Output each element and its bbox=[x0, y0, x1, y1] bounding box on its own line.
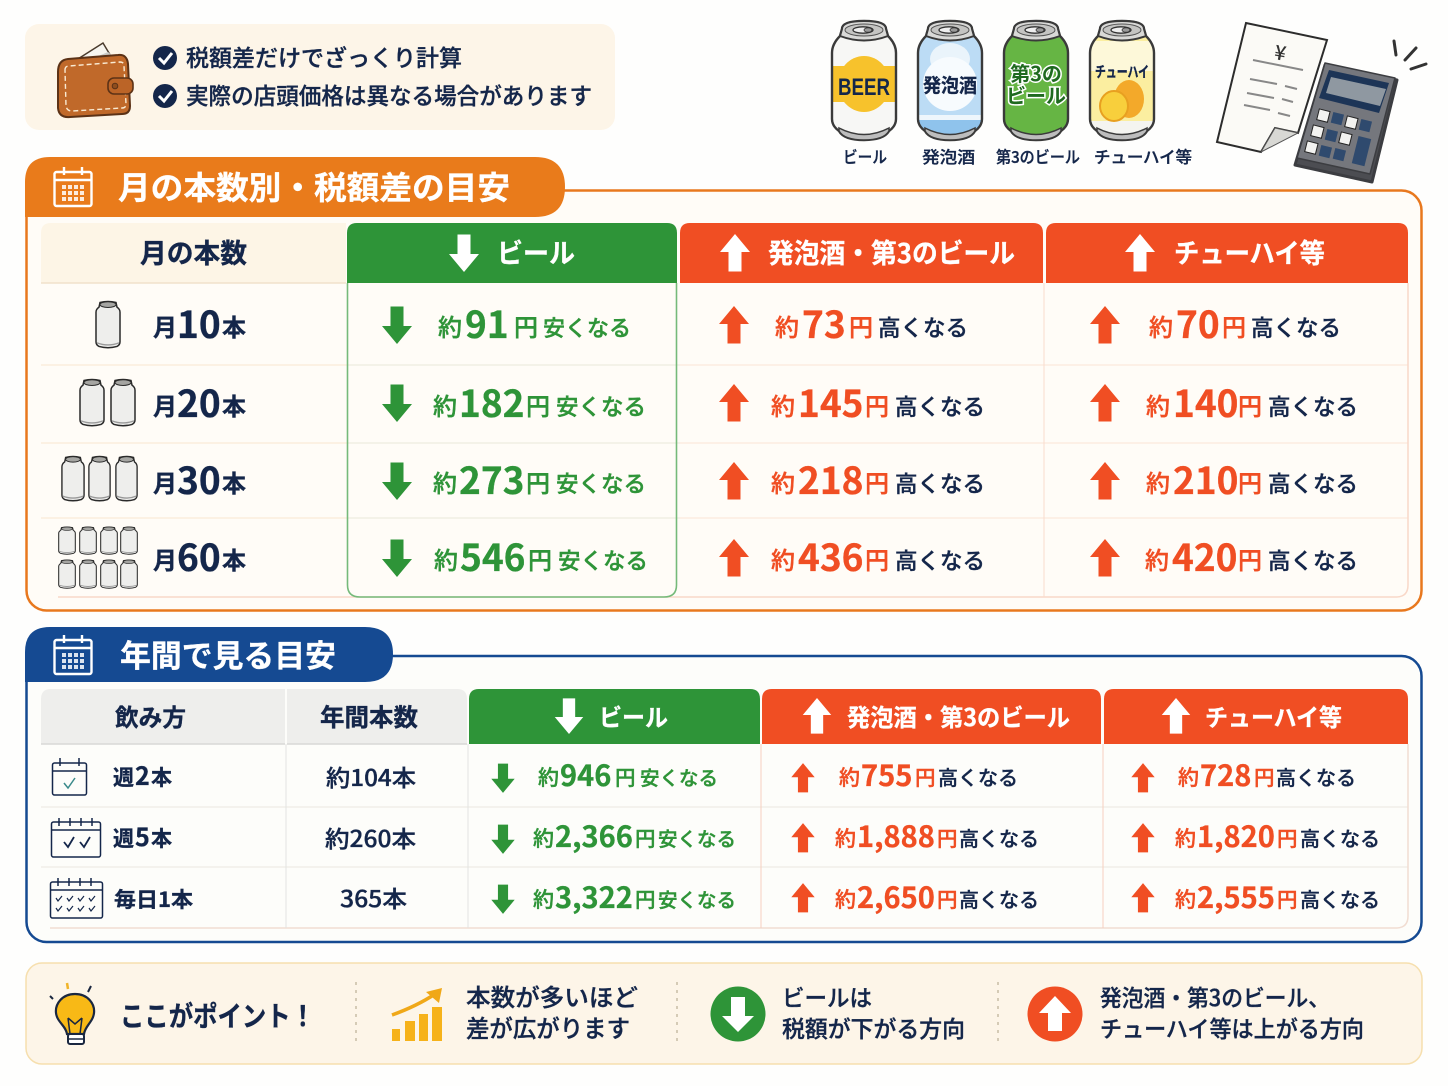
heading tab: annual bbox=[25, 627, 393, 682]
row: five times weekly: 約 bbox=[1175, 823, 1196, 853]
row: 60 per month: 60 bbox=[177, 528, 221, 582]
row: twice weekly: 高くなる bbox=[938, 762, 1018, 791]
icon: light bulb bbox=[50, 983, 94, 1044]
row: 20 per month: 約 bbox=[771, 387, 795, 422]
row: twice weekly: 約 bbox=[1178, 762, 1199, 792]
row: twice weekly: 946 bbox=[560, 753, 611, 795]
row: twice weekly: 2 bbox=[135, 757, 150, 793]
row: 10 per month: 約 bbox=[1149, 308, 1173, 343]
row: 10 per month: 10 bbox=[177, 295, 221, 349]
row: daily: 安くなる bbox=[658, 884, 736, 913]
row: 60 per month: 高くなる bbox=[1268, 544, 1358, 576]
row: five times weekly: 高くなる bbox=[1300, 823, 1380, 852]
row: 20 per month: 約 bbox=[433, 387, 457, 422]
row: five times weekly: 円 bbox=[937, 822, 958, 852]
row: 30 per month: 円 bbox=[526, 464, 550, 499]
text: point three bbox=[1100, 979, 1364, 1044]
row: 60 per month: 本 bbox=[222, 541, 246, 576]
row: five times weekly: 1,888 bbox=[857, 814, 935, 856]
row: 10 per month: 本 bbox=[222, 308, 246, 343]
row: 30 per month: 月 bbox=[153, 464, 177, 499]
text: point two: 税額が下がる方向 bbox=[782, 1010, 965, 1044]
row: five times weekly: 約 bbox=[835, 823, 856, 853]
row: five times weekly: 円 bbox=[635, 822, 656, 852]
row: 10 per month: 高くなる bbox=[878, 311, 968, 343]
check item 2: 実際の店頭価格は異なる場合があります bbox=[186, 77, 592, 111]
can: third beer: ビール bbox=[1006, 80, 1066, 109]
can: beer: BEER bbox=[838, 74, 890, 101]
row: 60 per month: 546 bbox=[460, 528, 526, 582]
panel: monthly table bbox=[25, 157, 1422, 610]
row: five times weekly: 週 bbox=[113, 823, 134, 853]
row: twice weekly: 週 bbox=[113, 762, 134, 792]
row: daily: 約 bbox=[1175, 884, 1196, 914]
row: five times weekly: 安くなる bbox=[658, 823, 736, 852]
header: beer bbox=[469, 689, 760, 744]
row: twice weekly: 728 bbox=[1200, 753, 1251, 795]
table rows grid bbox=[41, 283, 1408, 597]
row: five times weekly: 本 bbox=[151, 823, 172, 853]
row: daily: 約 bbox=[533, 884, 554, 914]
row: 20 per month: 高くなる bbox=[895, 390, 985, 422]
can: chuhai: チューハイ bbox=[1095, 61, 1149, 82]
row: 60 per month: 安くなる bbox=[558, 544, 648, 576]
can labels bbox=[843, 144, 1192, 168]
row: 20 per month: 145 bbox=[798, 374, 864, 428]
row: twice weekly: 755 bbox=[861, 753, 912, 795]
row: 60 per month: 円 bbox=[1238, 541, 1262, 576]
annual grid bbox=[41, 744, 1408, 928]
row: 10 per month: 高くなる bbox=[1251, 311, 1341, 343]
text: point one: 差が広がります bbox=[466, 1009, 630, 1044]
row: 60 per month: 約 bbox=[434, 541, 458, 576]
row: twice weekly: 安くなる bbox=[640, 762, 718, 791]
icon: green down circle bbox=[710, 986, 766, 1042]
row: 20 per month: 円 bbox=[865, 387, 889, 422]
icons: four drink cans bbox=[831, 21, 1192, 168]
row: 10 per month: 91 bbox=[465, 295, 509, 349]
row: daily: 365本 bbox=[340, 880, 407, 914]
row: 60 per month: 420 bbox=[1172, 528, 1238, 582]
can labels: 発泡酒 bbox=[922, 144, 975, 168]
table header: month count bbox=[41, 223, 346, 283]
can labels: チューハイ等 bbox=[1094, 144, 1192, 168]
text: point heading: ここがポイント！ bbox=[120, 995, 315, 1035]
row: 30 per month: 高くなる bbox=[895, 467, 985, 499]
header: annual count: 年間本数 bbox=[320, 699, 418, 734]
row: daily: 円 bbox=[1277, 883, 1298, 913]
can: beer bbox=[831, 21, 897, 140]
row: 30 per month: 273 bbox=[459, 451, 524, 505]
row: 10 per month: 円 bbox=[849, 308, 873, 343]
header: beer: ビール bbox=[599, 698, 668, 733]
row: 30 per month: 218 bbox=[798, 451, 864, 505]
header: chuhai: チューハイ等 bbox=[1205, 698, 1342, 733]
header: happoshu and third beer bbox=[762, 689, 1101, 744]
row: 20 per month: 円 bbox=[1238, 387, 1262, 422]
row: daily: 高くなる bbox=[959, 884, 1039, 913]
row: 20 per month: 182 bbox=[459, 374, 524, 428]
row: twice weekly: 約104本 bbox=[326, 759, 416, 793]
row: 10 per month: 約 bbox=[438, 308, 462, 343]
row: twice weekly: 円 bbox=[615, 761, 636, 791]
can: third beer: 第3の bbox=[1010, 58, 1062, 87]
row: twice weekly: 高くなる bbox=[1276, 762, 1356, 791]
header: happoshu and third beer: 発泡酒・第3のビール bbox=[847, 698, 1070, 733]
row: 20 per month: 本 bbox=[222, 387, 246, 422]
row: 30 per month: 本 bbox=[222, 464, 246, 499]
row: 30 per month: 約 bbox=[1146, 464, 1170, 499]
row: 20 per month: 高くなる bbox=[1268, 390, 1358, 422]
row: twice weekly: 約 bbox=[839, 762, 860, 792]
row: 30 per month: 約 bbox=[771, 464, 795, 499]
header: how to drink: 飲み方 bbox=[115, 698, 186, 733]
row: twice weekly: 本 bbox=[151, 762, 172, 792]
row: daily: 高くなる bbox=[1300, 884, 1380, 913]
down arrow white bbox=[449, 234, 479, 272]
row: daily: 3,322 bbox=[555, 875, 633, 917]
row: 60 per month: 約 bbox=[1145, 541, 1169, 576]
row: 60 per month: 月 bbox=[153, 541, 177, 576]
text: point one: 本数が多いほど bbox=[466, 978, 638, 1013]
icon: calendar bbox=[54, 635, 92, 674]
row: five times weekly: 2,366 bbox=[555, 814, 633, 856]
can: third beer bbox=[1004, 21, 1068, 140]
row: five times weekly: 高くなる bbox=[959, 823, 1039, 852]
row: five times weekly bbox=[52, 814, 1380, 857]
can: chuhai bbox=[1089, 21, 1155, 141]
header: chuhai bbox=[1046, 223, 1408, 283]
row: 30 per month: 円 bbox=[1238, 464, 1262, 499]
row: 10 per month: 約 bbox=[775, 308, 799, 343]
header: annual count bbox=[287, 689, 467, 744]
row: 60 per month: 円 bbox=[528, 541, 552, 576]
can labels: ビール bbox=[843, 144, 887, 168]
panel: notes bbox=[25, 24, 615, 130]
text: point three: チューハイ等は上がる方向 bbox=[1100, 1010, 1364, 1044]
row: five times weekly: 5 bbox=[135, 818, 150, 854]
row: 20 per month: 円 bbox=[526, 387, 550, 422]
icon: receipt and calculator: ¥ bbox=[1272, 36, 1289, 67]
icon: receipt and calculator bbox=[1217, 23, 1426, 182]
row: 30 per month bbox=[62, 451, 1358, 505]
header: chuhai bbox=[1104, 689, 1408, 744]
row: twice weekly bbox=[52, 753, 1356, 795]
header: happoshu and third beer: 発泡酒・第3のビール bbox=[768, 232, 1015, 271]
text: point two: ビールは bbox=[782, 979, 872, 1013]
row: daily: 約 bbox=[835, 884, 856, 914]
row: 60 per month: 436 bbox=[798, 528, 864, 582]
row: five times weekly: 約 bbox=[533, 823, 554, 853]
header: happoshu and third beer bbox=[680, 223, 1043, 283]
heading text: 年間で見る目安 bbox=[120, 631, 336, 676]
row: 30 per month: 約 bbox=[433, 464, 457, 499]
row: 10 per month: 73 bbox=[802, 295, 846, 349]
row: 60 per month: 円 bbox=[865, 541, 889, 576]
row: 20 per month: 20 bbox=[177, 374, 221, 428]
row: 30 per month: 円 bbox=[865, 464, 889, 499]
icon: rising bar chart bbox=[392, 988, 442, 1041]
table header: month count: 月の本数 bbox=[140, 232, 247, 271]
row: 10 per month: 円 bbox=[514, 308, 538, 343]
row: 20 per month: 約 bbox=[1146, 387, 1170, 422]
row: 30 per month: 30 bbox=[177, 451, 221, 505]
row: 20 per month: 140 bbox=[1173, 374, 1238, 428]
row: 30 per month: 高くなる bbox=[1268, 467, 1358, 499]
row: 10 per month: 月 bbox=[153, 308, 177, 343]
row: 10 per month bbox=[96, 295, 1341, 349]
row: 60 per month: 高くなる bbox=[895, 544, 985, 576]
row: twice weekly: 円 bbox=[1254, 761, 1274, 791]
row: 20 per month bbox=[80, 374, 1358, 428]
row: 60 per month: 約 bbox=[771, 541, 795, 576]
row: twice weekly: 約 bbox=[538, 762, 559, 792]
row: daily: 円 bbox=[635, 883, 656, 913]
heading text: 月の本数別・税額差の目安 bbox=[118, 163, 510, 209]
can: happoshu bbox=[917, 21, 983, 141]
text: point three: 発泡酒・第3のビール、 bbox=[1100, 979, 1330, 1013]
text: point one bbox=[466, 978, 638, 1044]
row: daily: 毎日1本 bbox=[114, 884, 193, 914]
row: twice weekly: 円 bbox=[915, 761, 936, 791]
row: daily bbox=[50, 875, 1380, 918]
row: daily: 円 bbox=[937, 883, 958, 913]
icon: calendar bbox=[54, 167, 92, 206]
row: daily: 2,650 bbox=[857, 875, 935, 917]
row: daily: 2,555 bbox=[1197, 875, 1275, 917]
row: 30 per month: 安くなる bbox=[556, 467, 646, 499]
row: 20 per month: 安くなる bbox=[556, 390, 646, 422]
row: 30 per month: 210 bbox=[1173, 451, 1238, 505]
row: 20 per month: 月 bbox=[153, 387, 177, 422]
row: 10 per month: 安くなる bbox=[543, 311, 631, 343]
icon: red up circle bbox=[1028, 986, 1082, 1042]
row: five times weekly: 円 bbox=[1277, 822, 1298, 852]
check item 1: 税額差だけでざっくり計算 bbox=[186, 39, 462, 73]
can: happoshu: 発泡酒 bbox=[923, 71, 977, 98]
row: five times weekly: 約260本 bbox=[325, 820, 416, 854]
row: five times weekly: 1,820 bbox=[1197, 814, 1275, 856]
row: 60 per month bbox=[59, 527, 1358, 588]
panel: annual table bbox=[25, 627, 1422, 942]
beer column bbox=[347, 223, 677, 597]
beer column: ビール bbox=[497, 232, 575, 271]
icon: wallet bbox=[58, 43, 133, 117]
row: 10 per month: 円 bbox=[1222, 308, 1246, 343]
header: chuhai: チューハイ等 bbox=[1174, 232, 1325, 271]
panel: key points bbox=[26, 963, 1422, 1064]
text: point two bbox=[782, 979, 965, 1044]
heading tab: monthly bbox=[25, 157, 565, 217]
header: how to drink bbox=[41, 689, 285, 744]
can labels: 第3のビール bbox=[996, 144, 1080, 168]
row: 10 per month: 70 bbox=[1176, 295, 1220, 349]
